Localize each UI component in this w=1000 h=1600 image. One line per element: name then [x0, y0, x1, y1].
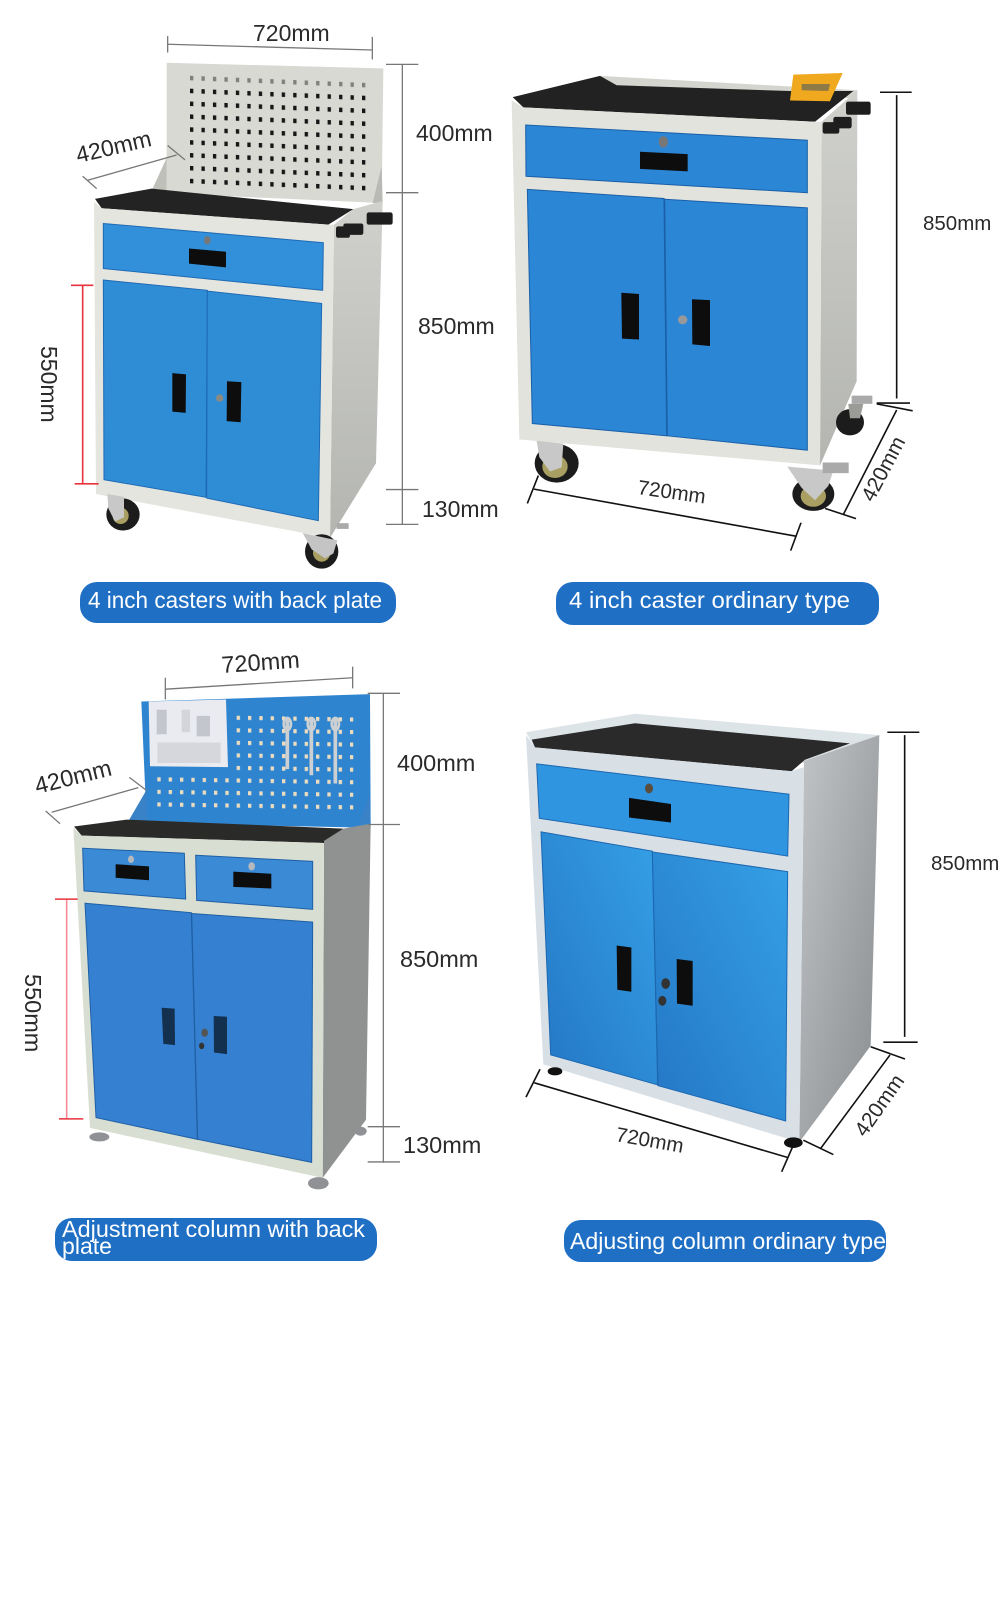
side handles	[823, 102, 871, 134]
cabinet doors	[541, 832, 788, 1121]
panel: adjustment column with back plate	[20, 647, 481, 1261]
drawer	[537, 764, 789, 856]
side panel	[820, 90, 857, 465]
cabinet on feet	[526, 714, 919, 1172]
front frame	[512, 100, 822, 465]
width label: 720mm	[636, 476, 707, 508]
body height label: 850mm	[418, 313, 495, 339]
cabinet doors	[527, 189, 807, 450]
side panel	[323, 824, 371, 1178]
rubber top mat	[95, 189, 353, 225]
front frame	[526, 735, 804, 1142]
rear top edge	[600, 76, 857, 98]
rubber top mat	[513, 76, 853, 122]
cabinet with blue back plate on adjustable feet	[46, 667, 400, 1189]
panel: adjusting column ordinary type	[526, 714, 999, 1262]
cabinet doors	[103, 280, 322, 521]
caption pill	[55, 1216, 377, 1261]
front frame	[94, 202, 334, 538]
dimension lines	[83, 36, 418, 525]
caption pill	[564, 1220, 886, 1262]
cabinet with pegboard back plate on casters	[71, 36, 418, 569]
casters	[106, 494, 349, 569]
yellow parts tray	[790, 73, 843, 101]
caption pill	[80, 582, 396, 623]
body height label: 850mm	[400, 946, 478, 972]
side panel	[799, 735, 879, 1142]
dimension lines	[46, 667, 400, 1163]
cabinet doors	[85, 903, 313, 1162]
dimension lines	[526, 732, 919, 1172]
panel: 4 inch caster ordinary type	[512, 73, 991, 625]
side panel	[330, 201, 383, 538]
instruction sheet	[149, 699, 228, 767]
top rim	[526, 714, 879, 763]
height label: 850mm	[931, 852, 999, 875]
drawer	[103, 223, 323, 290]
wrenches	[284, 718, 339, 784]
door height label: 550mm	[20, 974, 46, 1052]
blue pegboard back plate	[128, 694, 371, 828]
panel: 4 inch casters with back plate	[36, 20, 499, 623]
feet	[548, 1067, 803, 1148]
height label: 850mm	[923, 212, 991, 235]
foot height label: 130mm	[403, 1132, 481, 1158]
adjustable feet	[89, 1127, 367, 1189]
caption pill: Adjusting column ordinary type	[570, 1228, 886, 1254]
depth label: 420mm	[73, 125, 154, 168]
red height line	[71, 285, 99, 484]
drawer	[526, 125, 807, 193]
depth label: 420mm	[857, 433, 910, 505]
width label: 720mm	[253, 20, 330, 46]
front frame	[73, 828, 324, 1178]
door height label: 550mm	[36, 346, 62, 423]
caption pill: plate	[62, 1233, 112, 1259]
caster height label: 130mm	[422, 496, 499, 522]
width label: 720mm	[614, 1123, 685, 1158]
dimension lines	[527, 92, 913, 551]
rubber top mat	[532, 723, 850, 771]
back plate height label: 400mm	[397, 750, 475, 776]
drawers	[83, 848, 313, 909]
depth label: 420mm	[32, 755, 114, 799]
casters	[535, 396, 872, 511]
back plate height label: 400mm	[416, 120, 493, 146]
side handles	[336, 212, 393, 238]
red height line	[55, 899, 83, 1119]
width label: 720mm	[221, 647, 301, 678]
caption pill	[556, 582, 879, 625]
pegboard back plate	[152, 63, 383, 203]
caption pill: Adjustment column with back	[62, 1216, 366, 1242]
depth label: 420mm	[850, 1070, 909, 1141]
caption pill: 4 inch caster ordinary type	[569, 587, 850, 613]
rubber top mat	[74, 820, 343, 843]
cabinet on casters	[512, 73, 913, 551]
caption pill: 4 inch casters with back plate	[88, 587, 382, 613]
